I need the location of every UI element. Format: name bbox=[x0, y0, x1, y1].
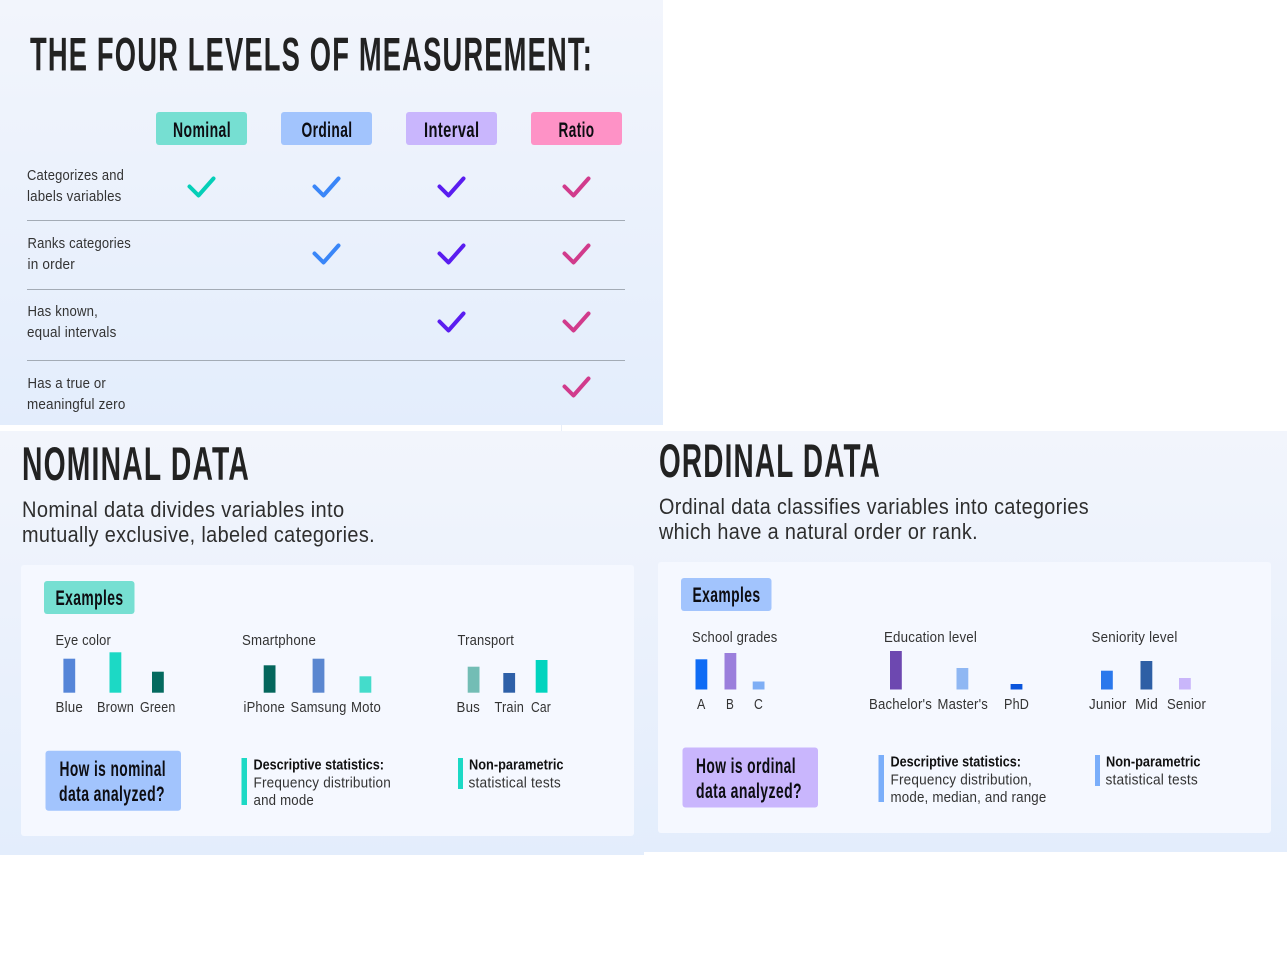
examples tag bbox=[681, 578, 772, 611]
chart: smartphone: iPhone bbox=[244, 700, 285, 716]
ordinal card bbox=[658, 562, 1271, 833]
chart: smartphone bbox=[242, 633, 381, 716]
chart: transport: Bus bbox=[456, 700, 480, 716]
chart: transport: Car bbox=[531, 700, 551, 716]
non-parametric note: statistical tests bbox=[468, 776, 561, 792]
callout: how is nominal data analyzed bbox=[46, 751, 181, 811]
row 1: categorizes and labels variables: Categorizes and bbox=[27, 168, 124, 184]
nominal card bbox=[21, 565, 634, 836]
chart: seniority level bbox=[1089, 630, 1206, 713]
chart: transport: Transport bbox=[458, 633, 514, 649]
nominal description bbox=[22, 497, 375, 547]
header: Interval bbox=[406, 112, 497, 145]
chart: eye color: Eye color bbox=[56, 633, 111, 649]
row 3: known equal intervals: equal intervals bbox=[27, 325, 116, 341]
title: THE FOUR LEVELS OF MEASUREMENT: bbox=[30, 28, 593, 80]
header: Ratio: Ratio bbox=[558, 119, 594, 142]
nominal heading: NOMINAL DATA bbox=[22, 437, 250, 490]
chart: education level: PhD bbox=[1004, 697, 1029, 713]
descriptive statistics note: Descriptive statistics: bbox=[890, 754, 1021, 770]
header: Ratio bbox=[531, 112, 622, 145]
nominal description: mutually exclusive, labeled categories. bbox=[22, 522, 375, 547]
chart: smartphone: Moto bbox=[351, 700, 381, 716]
nominal description: Nominal data divides variables into bbox=[22, 497, 344, 522]
chart: seniority level: Junior bbox=[1089, 697, 1126, 713]
chart: transport bbox=[456, 633, 551, 716]
chart: school grades: C bbox=[754, 697, 763, 713]
callout: how is ordinal data analyzed: How is ordinal bbox=[696, 755, 796, 778]
chart: school grades bbox=[692, 630, 778, 713]
chart: transport: Train bbox=[494, 700, 524, 716]
panel: nominal data bbox=[0, 431, 644, 855]
descriptive statistics note: Descriptive statistics: bbox=[254, 758, 384, 774]
examples tag: Examples bbox=[692, 584, 760, 607]
non-parametric note: Non-parametric bbox=[1106, 754, 1200, 770]
chart: eye color: Blue bbox=[56, 700, 83, 716]
ordinal description: which have a natural order or rank. bbox=[658, 519, 978, 544]
descriptive statistics note: Frequency distribution, bbox=[890, 772, 1032, 788]
row 1: categorizes and labels variables bbox=[27, 168, 588, 205]
chart: smartphone: Smartphone bbox=[242, 633, 316, 649]
row 2: ranks categories in order bbox=[28, 236, 588, 273]
header: Ordinal: Ordinal bbox=[302, 119, 352, 142]
row 4: true or meaningful zero: Has a true or bbox=[28, 376, 106, 392]
examples tag: Examples bbox=[56, 587, 124, 610]
chart: eye color: Brown bbox=[97, 700, 134, 716]
callout: how is ordinal data analyzed: data analyzed? bbox=[696, 780, 802, 803]
descriptive statistics note: mode, median, and range bbox=[890, 790, 1046, 806]
examples tag bbox=[44, 581, 134, 614]
descriptive statistics note bbox=[878, 754, 1046, 806]
chart: education level: Bachelor's bbox=[869, 697, 932, 713]
descriptive statistics note: and mode bbox=[254, 793, 314, 809]
chart: seniority level: Senior bbox=[1167, 697, 1206, 713]
ordinal description bbox=[658, 494, 1089, 544]
callout: how is ordinal data analyzed bbox=[682, 748, 818, 808]
chart: school grades: School grades bbox=[692, 630, 778, 646]
header: Ordinal bbox=[281, 112, 372, 145]
chart: education level bbox=[869, 630, 1029, 713]
panel: four levels of measurement table bbox=[0, 0, 663, 425]
chart: eye color: Green bbox=[140, 700, 176, 716]
descriptive statistics note bbox=[242, 758, 391, 809]
chart: school grades: B bbox=[726, 697, 734, 713]
panel: ordinal data bbox=[644, 431, 1287, 852]
header: Interval: Interval bbox=[424, 119, 480, 142]
ordinal description: Ordinal data classifies variables into categories bbox=[659, 494, 1089, 519]
chart: eye color bbox=[56, 633, 176, 716]
header: Nominal: Nominal bbox=[173, 119, 231, 142]
callout: how is nominal data analyzed: data analyzed? bbox=[59, 783, 165, 806]
row 2: ranks categories in order: in order bbox=[28, 257, 75, 273]
chart: smartphone: Samsung bbox=[290, 700, 346, 716]
chart: education level: Master's bbox=[938, 697, 988, 713]
row 1: categorizes and labels variables: labels variables bbox=[27, 189, 122, 205]
ordinal heading: ORDINAL DATA bbox=[659, 434, 881, 487]
row 3: known equal intervals bbox=[27, 304, 588, 341]
chart: seniority level: Mid bbox=[1135, 697, 1158, 713]
callout: how is nominal data analyzed: How is nominal bbox=[60, 758, 166, 781]
chart: education level: Education level bbox=[884, 630, 977, 646]
descriptive statistics note: Frequency distribution bbox=[254, 776, 391, 792]
non-parametric note bbox=[458, 758, 564, 792]
chart: school grades: A bbox=[697, 697, 706, 713]
row 3: known equal intervals: Has known, bbox=[28, 304, 98, 320]
chart: seniority level: Seniority level bbox=[1092, 630, 1178, 646]
non-parametric note: Non-parametric bbox=[469, 758, 564, 774]
non-parametric note: statistical tests bbox=[1106, 772, 1198, 788]
row 2: ranks categories in order: Ranks categories bbox=[28, 236, 131, 252]
row 4: true or meaningful zero bbox=[27, 376, 588, 413]
non-parametric note bbox=[1095, 754, 1200, 788]
header: Nominal bbox=[156, 112, 247, 145]
row 4: true or meaningful zero: meaningful zero bbox=[27, 397, 126, 413]
